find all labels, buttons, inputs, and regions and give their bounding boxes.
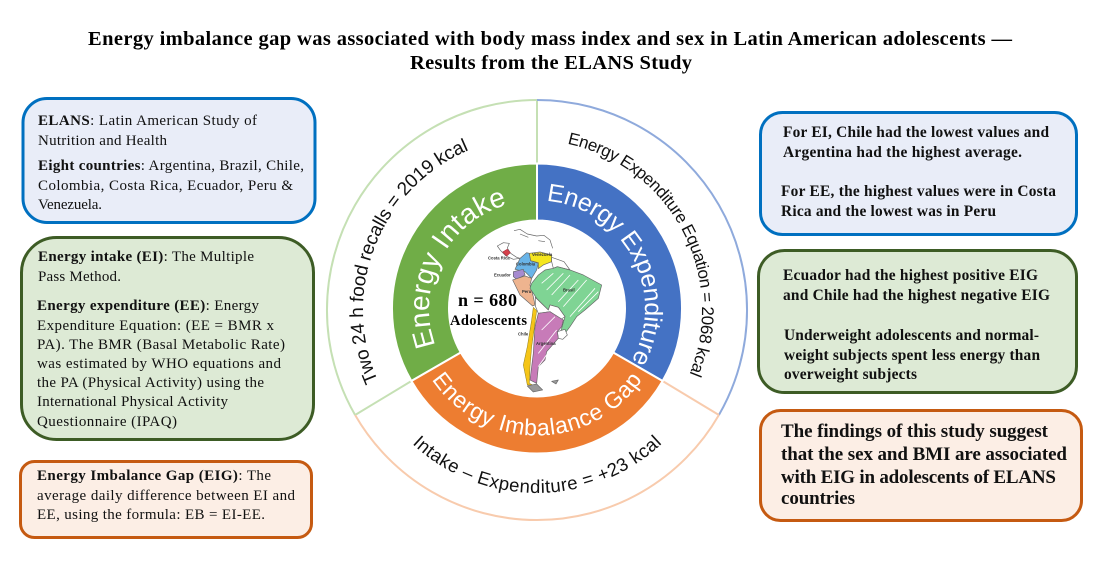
panel: energy intake and expenditure methods: PA). The BMR (Basal Metabolic Rate) — [37, 337, 285, 353]
map: South America — [488, 229, 602, 392]
panel: energy imbalance gap definition — [20, 462, 312, 538]
sample size label: n = 680 — [458, 290, 517, 310]
panel: ELANS description: Nutrition and Health — [38, 133, 168, 149]
outer label: expenditure: Energy Expenditure Equation = 2068 kcal — [568, 132, 714, 378]
panel: EIG results: Ecuador had the highest positive EIG — [783, 267, 1038, 284]
ring segment: Energy Intake: Energy Intake — [412, 192, 504, 348]
panel: energy imbalance gap definition: EE, using the formula: EB = EI-EE. — [37, 507, 265, 523]
outer ring: expenditure arc — [537, 100, 747, 415]
panel: energy intake and expenditure methods: Energy intake (EI): The Multiple — [38, 249, 254, 265]
map: South America: Argentina — [536, 341, 556, 346]
panel: ELANS description: Venezuela. — [38, 197, 102, 213]
panel: EIG results: Underweight adolescents and normal- — [784, 327, 1039, 344]
panel: energy intake and expenditure methods: was estimated by WHO equations and — [37, 356, 282, 372]
panel: energy intake and expenditure methods — [22, 238, 314, 440]
panel: energy intake and expenditure methods: the PA (Physical Activity) using the — [37, 375, 264, 391]
outer label: imbalance: Intake – Expenditure = +23 kcal — [413, 434, 662, 494]
map: South America: Venezuela — [532, 252, 553, 257]
outer ring: imbalance arc — [355, 381, 719, 520]
panel: energy imbalance gap definition: Energy Imbalance Gap (EIG): The — [37, 468, 271, 484]
panel: energy imbalance gap definition: average daily difference between EI and — [37, 488, 296, 504]
map: South America: Peru — [522, 289, 532, 294]
panel: energy intake and expenditure methods: Pass Method. — [38, 269, 121, 285]
ring segment: Energy Expenditure: Energy Expenditure — [548, 184, 664, 364]
panel: study findings — [760, 410, 1082, 520]
outer label: intake: Two 24 h food recalls = 2019 kcal — [349, 138, 468, 386]
outer ring: intake arc — [327, 100, 537, 415]
panel: study findings: The findings of this study suggest — [781, 421, 1049, 442]
ring segment: Energy Imbalance Gap: Energy Imbalance Gap — [432, 372, 641, 436]
map: South America: Ecuador — [494, 272, 511, 277]
panel: ELANS description: ELANS: Latin American Study of — [38, 113, 257, 129]
ring segment: Energy Intake — [392, 164, 536, 382]
panel: energy intake and expenditure methods: Questionnaire (IPAQ) — [37, 414, 177, 430]
panel: study findings: that the sex and BMI are associated — [781, 444, 1067, 465]
panel: EIG results: weight subjects spent less energy than — [784, 347, 1040, 364]
sample size label — [450, 290, 527, 329]
title: Results from the ELANS Study — [410, 52, 693, 74]
title: Energy imbalance gap was associated with body mass index and sex in Latin American adolescents — — [88, 28, 1012, 50]
panel: energy intake and expenditure methods: International Physical Activity — [37, 394, 228, 410]
panel: energy intake and expenditure methods: Energy expenditure (EE): Energy — [37, 298, 260, 314]
panel: study findings: countries — [781, 488, 855, 509]
panel: ELANS description: Colombia, Costa Rica, Ecuador, Peru & — [38, 178, 293, 194]
title — [88, 28, 1012, 74]
sample size label: Adolescents — [450, 313, 527, 329]
panel: EI and EE country results — [760, 112, 1076, 234]
map: South America: Chile — [518, 331, 529, 336]
panel: study findings: with EIG in adolescents of ELANS — [781, 467, 1056, 488]
panel: EI and EE country results: Rica and the lowest was in Peru — [781, 203, 996, 220]
panel: EI and EE country results: Argentina had the highest average. — [783, 144, 1022, 161]
panel: ELANS description — [23, 98, 315, 222]
map: South America: Costa Rica — [488, 255, 510, 260]
ring segment: Energy Imbalance Gap — [410, 352, 664, 452]
panel: ELANS description: Eight countries: Argentina, Brazil, Chile, — [38, 158, 304, 174]
panel: EIG results: and Chile had the highest negative EIG — [783, 287, 1050, 304]
map: South America: Brasil — [563, 287, 575, 292]
panel: EIG results — [758, 250, 1076, 392]
panel: EI and EE country results: For EE, the highest values were in Costa — [781, 183, 1056, 200]
panel: energy intake and expenditure methods: Expenditure Equation: (EE = BMR x — [37, 318, 274, 334]
panel: EI and EE country results: For EI, Chile had the lowest values and — [783, 124, 1049, 141]
panel: EIG results: overweight subjects — [784, 366, 917, 383]
map: South America: Colombia — [516, 261, 536, 266]
diagram: central circular diagram — [326, 99, 748, 521]
